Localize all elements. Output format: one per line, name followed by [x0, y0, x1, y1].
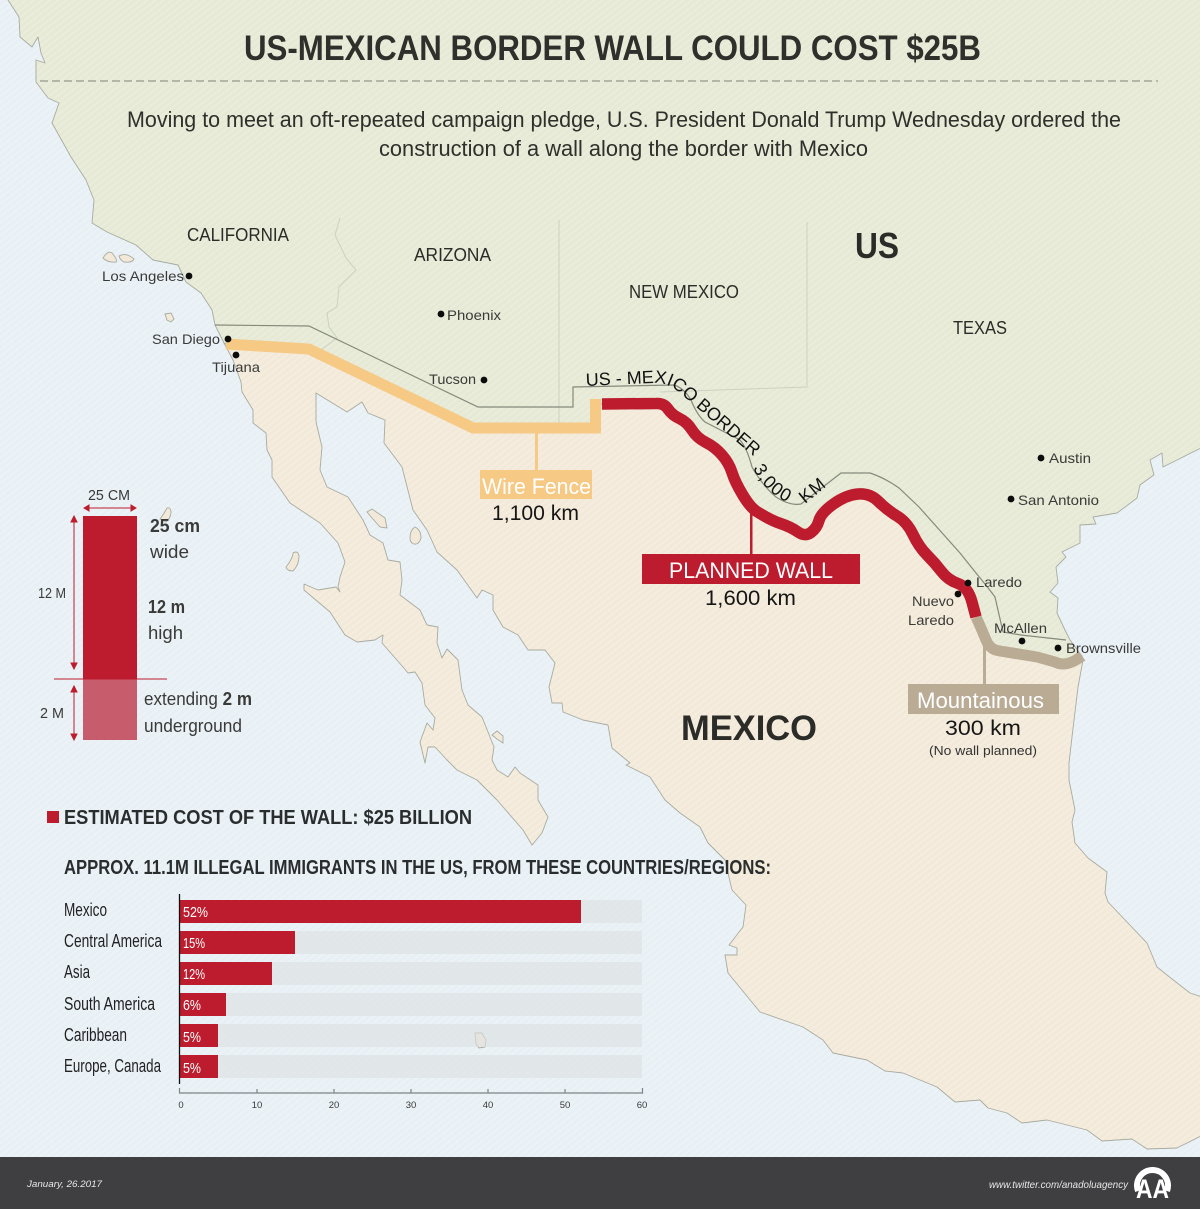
city markers: [102, 268, 1141, 656]
border length label on curve: 3,000: [754, 464, 791, 501]
category labels: Europe, Canada: [64, 1056, 162, 1076]
percent labels: 12%: [183, 966, 205, 983]
state and country labels: US: [855, 225, 899, 266]
mountainous section: [908, 617, 1082, 758]
percent labels: 5%: [183, 1029, 201, 1046]
city names: Nuevo: [912, 593, 954, 609]
no wall note: (No wall planned): [929, 743, 1037, 758]
intro text: construction of a wall along the border with Mexico: [379, 136, 868, 161]
chart track bars: [180, 900, 642, 1078]
state and country labels: CALIFORNIA: [187, 225, 289, 245]
city names: Phoenix: [447, 307, 501, 323]
category labels: [64, 900, 163, 1076]
dimension labels: [38, 487, 130, 722]
category labels: Mexico: [64, 900, 107, 920]
border length label on curve: KM: [798, 478, 826, 504]
value bars: [180, 900, 581, 1078]
state and country labels: [187, 225, 1007, 748]
dimension descriptions: extending 2 m: [144, 689, 252, 709]
value axis labels: 60: [637, 1100, 647, 1111]
city names: Laredo: [908, 612, 954, 628]
category labels: Asia: [64, 962, 91, 982]
US-Mexico border line: [215, 325, 1066, 640]
icon: agency logo: AA: [1136, 1174, 1169, 1204]
dimension descriptions: high: [148, 623, 183, 643]
category labels: South America: [64, 994, 156, 1014]
value axis labels: 30: [406, 1100, 416, 1111]
land: Mexico: [224, 343, 1200, 1149]
dimension descriptions: [144, 516, 252, 736]
city names: San Antonio: [1018, 492, 1099, 508]
percent labels: 5%: [183, 1060, 201, 1077]
state and country labels: NEW MEXICO: [629, 282, 739, 302]
city names: Laredo: [976, 574, 1022, 590]
fence label: Wire Fence: [482, 474, 591, 499]
title: US-MEXICAN BORDER WALL COULD COST $25B: [244, 29, 981, 68]
mountainous label: Mountainous: [917, 688, 1044, 713]
intro text: Moving to meet an oft-repeated campaign pledge, U.S. President Donald Trump Wednesday ordered the: [127, 107, 1121, 132]
title divider: [40, 80, 1158, 82]
ground line: [54, 678, 167, 680]
chart heading: APPROX. 11.1M ILLEGAL IMMIGRANTS IN THE US, FROM THESE COUNTRIES/REGIONS:: [64, 857, 771, 879]
dimension labels: 12 M: [38, 585, 66, 602]
bar chart: [64, 894, 647, 1111]
islands: [103, 252, 503, 1048]
wall distance: 1,600 km: [705, 587, 796, 610]
dimension descriptions: wide: [149, 542, 189, 562]
value axis labels: 20: [329, 1100, 339, 1111]
land: United States: [5, 0, 1200, 663]
fence label box: [480, 470, 592, 499]
state and country labels: TEXAS: [953, 318, 1007, 338]
footer background: [0, 1157, 1200, 1209]
value axis labels: 50: [560, 1100, 570, 1111]
wire fence section: [226, 344, 596, 525]
dimension labels: 25 CM: [88, 487, 130, 504]
dimension labels: 2 M: [40, 705, 64, 722]
category axis: [178, 894, 180, 1084]
mountainous label box: [908, 684, 1059, 714]
percent labels: [183, 904, 208, 1077]
city names: Los Angeles: [102, 268, 184, 284]
dimension descriptions: underground: [144, 716, 242, 736]
percent labels: 15%: [183, 935, 205, 952]
red bullet: [47, 811, 59, 823]
planned wall section: [602, 403, 976, 617]
wall label: PLANNED WALL: [669, 558, 833, 583]
value axis labels: 0: [178, 1100, 184, 1111]
wall dimensions diagram: [38, 487, 252, 740]
fence distance: 1,100 km: [492, 502, 579, 525]
city names: [102, 268, 1141, 656]
dimension descriptions: 12 m: [148, 597, 185, 617]
state and country labels: MEXICO: [681, 709, 817, 748]
value axis labels: [178, 1100, 647, 1111]
mountainous route: [976, 617, 1082, 664]
value axis labels: 40: [483, 1100, 493, 1111]
depth arrow: [71, 686, 77, 740]
city names: Brownsville: [1066, 640, 1141, 656]
percent labels: 6%: [183, 997, 201, 1014]
city names: San Diego: [152, 331, 220, 347]
city names: Tucson: [429, 371, 476, 387]
fence route: [226, 344, 596, 428]
fence leader: [535, 433, 538, 470]
twitter link: www.twitter.com/anadoluagency: [989, 1179, 1129, 1191]
height arrow: [71, 516, 77, 669]
cost heading: [47, 807, 472, 829]
dimension descriptions: 25 cm: [150, 516, 200, 536]
cost text: ESTIMATED COST OF THE WALL: $25 BILLION: [64, 807, 472, 829]
width arrow: [84, 505, 136, 511]
state lines: [321, 218, 807, 427]
mountainous distance: 300 km: [945, 717, 1021, 740]
city names: Austin: [1049, 450, 1091, 466]
city names: McAllen: [994, 620, 1047, 636]
intro text: [127, 107, 1121, 161]
percent labels: 52%: [183, 904, 208, 921]
category labels: Caribbean: [64, 1025, 127, 1045]
value axis: [180, 1088, 642, 1093]
underground wall: [83, 679, 137, 740]
city names: Tijuana: [212, 359, 260, 375]
wall route: [602, 403, 976, 617]
date: January, 26.2017: [26, 1179, 103, 1190]
wall label box: [642, 554, 860, 584]
value axis labels: 10: [252, 1100, 262, 1111]
border length label on curve: US - MEXICO BORDER: [586, 370, 760, 456]
state and country labels: ARIZONA: [414, 245, 491, 265]
city dots: [186, 273, 1061, 651]
mountainous leader: [983, 640, 986, 684]
border length label on curve: [586, 370, 826, 504]
wall leader: [750, 507, 752, 554]
category labels: Central America: [64, 931, 163, 951]
above-ground wall: [83, 516, 137, 679]
footer bar: [0, 1157, 1200, 1209]
